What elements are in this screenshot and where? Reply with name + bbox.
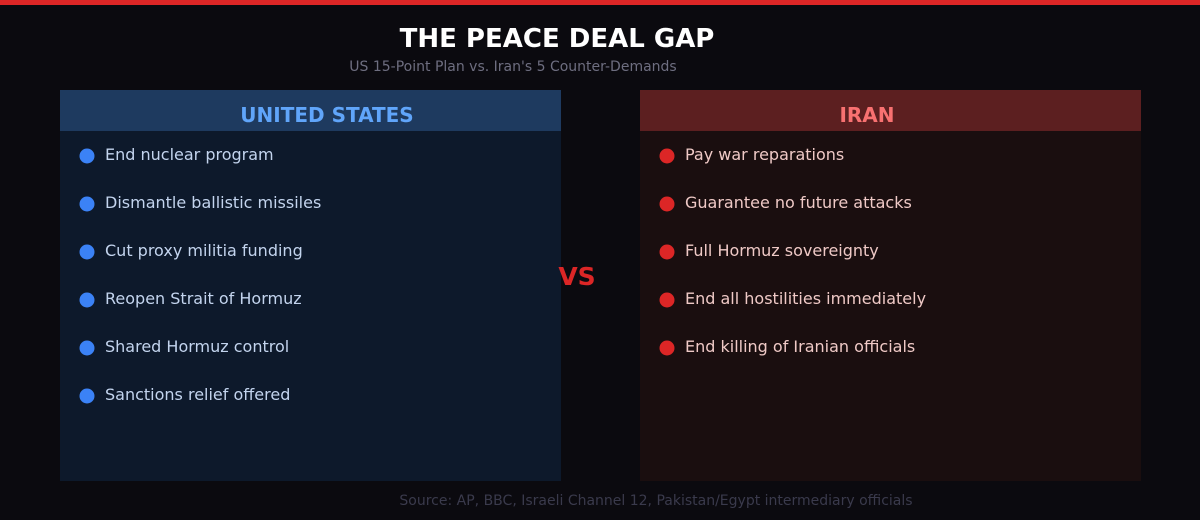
list: us demands: Dismantle ballistic missiles <box>105 193 321 212</box>
list: us demands: Sanctions relief offered <box>105 385 290 404</box>
list: us demands: Reopen Strait of Hormuz <box>105 289 302 308</box>
subtitle: US 15-Point Plan vs. Iran's 5 Counter-Demands <box>349 59 677 75</box>
vs label: VS <box>558 262 596 291</box>
list: iran demands <box>660 145 926 356</box>
list: iran demands: End killing of Iranian officials <box>685 337 915 356</box>
list: iran demands: Full Hormuz sovereignty <box>685 241 879 260</box>
source note: Source: AP, BBC, Israeli Channel 12, Pakistan/Egypt intermediary officials <box>399 493 913 509</box>
heading: united states: UNITED STATES <box>240 103 414 127</box>
list: us demands: Shared Hormuz control <box>105 337 289 356</box>
list: iran demands: End all hostilities immediately <box>685 289 926 308</box>
panel: united states <box>60 90 561 481</box>
list: iran demands: Pay war reparations <box>685 145 844 164</box>
list: us demands <box>80 145 321 404</box>
list: us demands: Cut proxy militia funding <box>105 241 303 260</box>
panel: iran <box>640 90 1141 481</box>
list: us demands: End nuclear program <box>105 145 274 164</box>
list: iran demands: Guarantee no future attacks <box>685 193 912 212</box>
heading: iran: IRAN <box>839 103 895 127</box>
title: THE PEACE DEAL GAP <box>400 24 714 54</box>
